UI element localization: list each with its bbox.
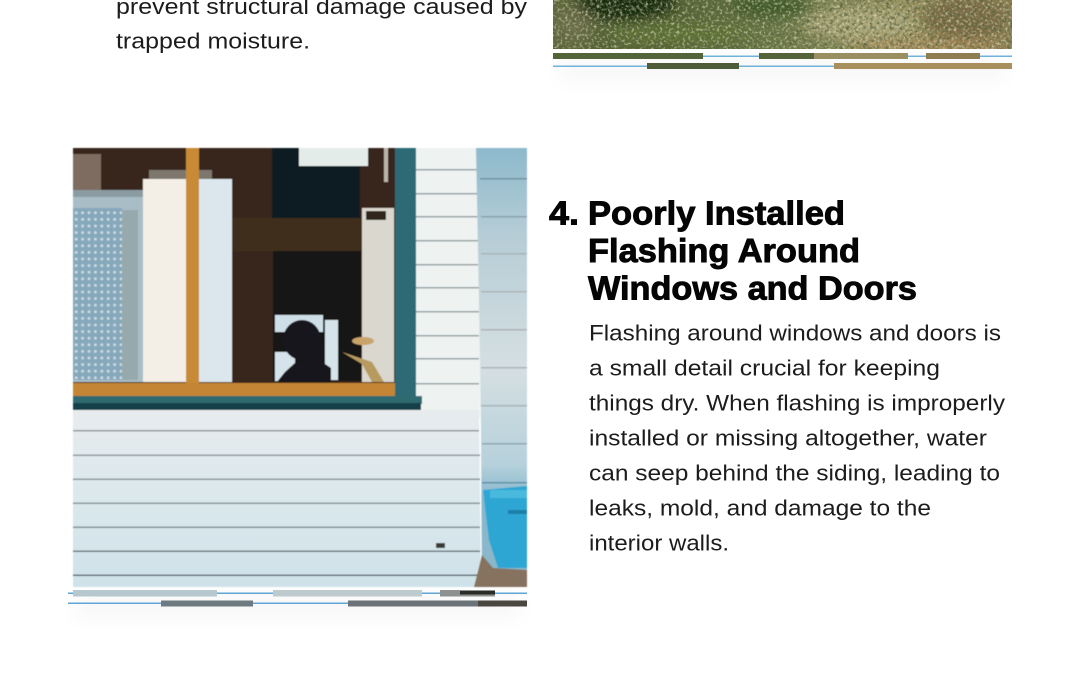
photo: house window with siding bbox=[73, 148, 527, 618]
person silhouette bbox=[277, 320, 331, 382]
glitch strips under grass photo bbox=[553, 53, 1012, 69]
body text: flashing explanation: things dry. When flashing is improperly bbox=[589, 390, 1006, 416]
window interior bbox=[73, 148, 395, 384]
blue bucket bbox=[483, 486, 527, 568]
horizontal siding boards bbox=[73, 410, 481, 587]
window frame bbox=[73, 148, 422, 410]
body text: flashing explanation: leaks, mold, and damage to the bbox=[589, 496, 931, 520]
body text: flashing explanation: Flashing around windows and doors is bbox=[589, 320, 1001, 346]
glitch strips under window photo bbox=[68, 590, 527, 606]
body text: flashing explanation: a small detail crucial for keeping bbox=[589, 356, 940, 380]
text block: end of previous section bbox=[116, 0, 528, 54]
text block: end of previous section: trapped moisture. bbox=[116, 28, 310, 54]
body text: flashing explanation: installed or missing altogether, water bbox=[589, 426, 988, 450]
body text: flashing explanation bbox=[589, 320, 1006, 556]
heading: poorly installed flashing: Windows and Doors bbox=[588, 270, 917, 306]
dirt at wall base bbox=[474, 555, 527, 587]
body text: flashing explanation: interior walls. bbox=[589, 530, 729, 556]
heading: poorly installed flashing bbox=[549, 194, 917, 306]
heading: poorly installed flashing: Poorly Installed bbox=[588, 194, 845, 232]
dried flowers bbox=[342, 337, 384, 382]
house siding, right-hand white boards bbox=[415, 148, 480, 418]
body text: flashing explanation: can seep behind the siding, leading to bbox=[589, 460, 1000, 486]
heading: poorly installed flashing: 4. bbox=[549, 194, 579, 232]
photo: grass and shrubs, cropped at the top bbox=[553, 0, 1012, 49]
neighbouring wall in blue shade bbox=[476, 148, 527, 587]
heading: poorly installed flashing: Flashing Around bbox=[588, 232, 860, 269]
